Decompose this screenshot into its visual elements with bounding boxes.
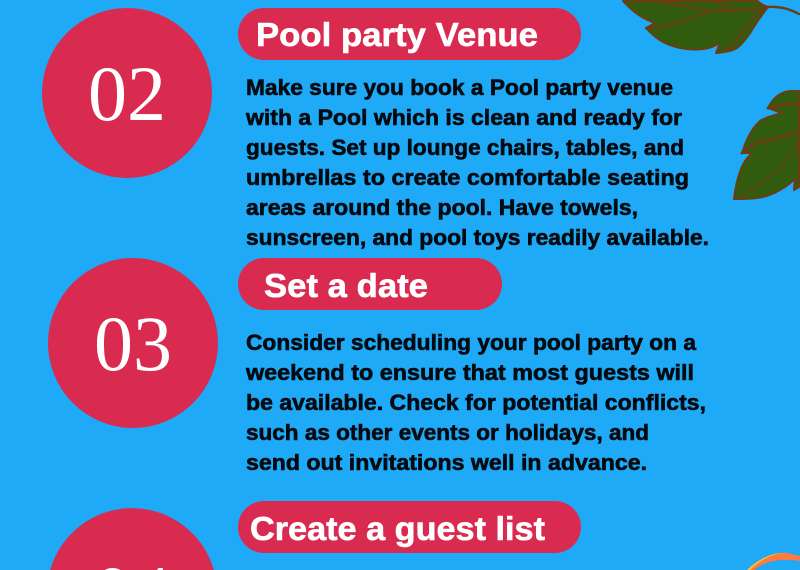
step 03 badge (48, 258, 218, 428)
step 03 text block (245, 330, 706, 475)
icon: pool float ring (747, 553, 800, 570)
step 02 text block: Make sure you book a Pool party venue (246, 75, 673, 100)
step 03 text block: send out invitations well in advance. (246, 450, 647, 475)
step 02 badge (42, 8, 212, 178)
step 03 heading: Set a date (264, 267, 428, 304)
step 03 badge: 03 (94, 300, 172, 387)
step 04 heading: Create a guest list (250, 510, 545, 547)
step 03 text block: be available. Check for potential conflicts, (246, 390, 706, 415)
step 02 text block: umbrellas to create comfortable seating (246, 165, 689, 190)
step 04 heading (238, 501, 581, 553)
step 02 text block (245, 75, 709, 250)
step 03 text block: weekend to ensure that most guests will (245, 360, 694, 385)
step 02 badge: 02 (88, 50, 166, 137)
step 03 text block: such as other events or holidays, and (246, 420, 649, 445)
step 04 badge (50, 508, 214, 570)
step 03 heading (238, 258, 502, 310)
step 03 text block: Consider scheduling your pool party on a (246, 330, 697, 355)
step 02 text block: with a Pool which is clean and ready for (245, 105, 682, 130)
step 02 heading (238, 8, 581, 60)
icon: right leaf (734, 91, 799, 199)
step 02 text block: sunscreen, and pool toys readily available. (246, 225, 709, 250)
icon: top leaf (623, 1, 799, 53)
step 02 text block: areas around the pool. Have towels, (246, 195, 638, 220)
step 02 text block: guests. Set up lounge chairs, tables, and (246, 135, 684, 160)
step 02 heading: Pool party Venue (256, 16, 538, 53)
